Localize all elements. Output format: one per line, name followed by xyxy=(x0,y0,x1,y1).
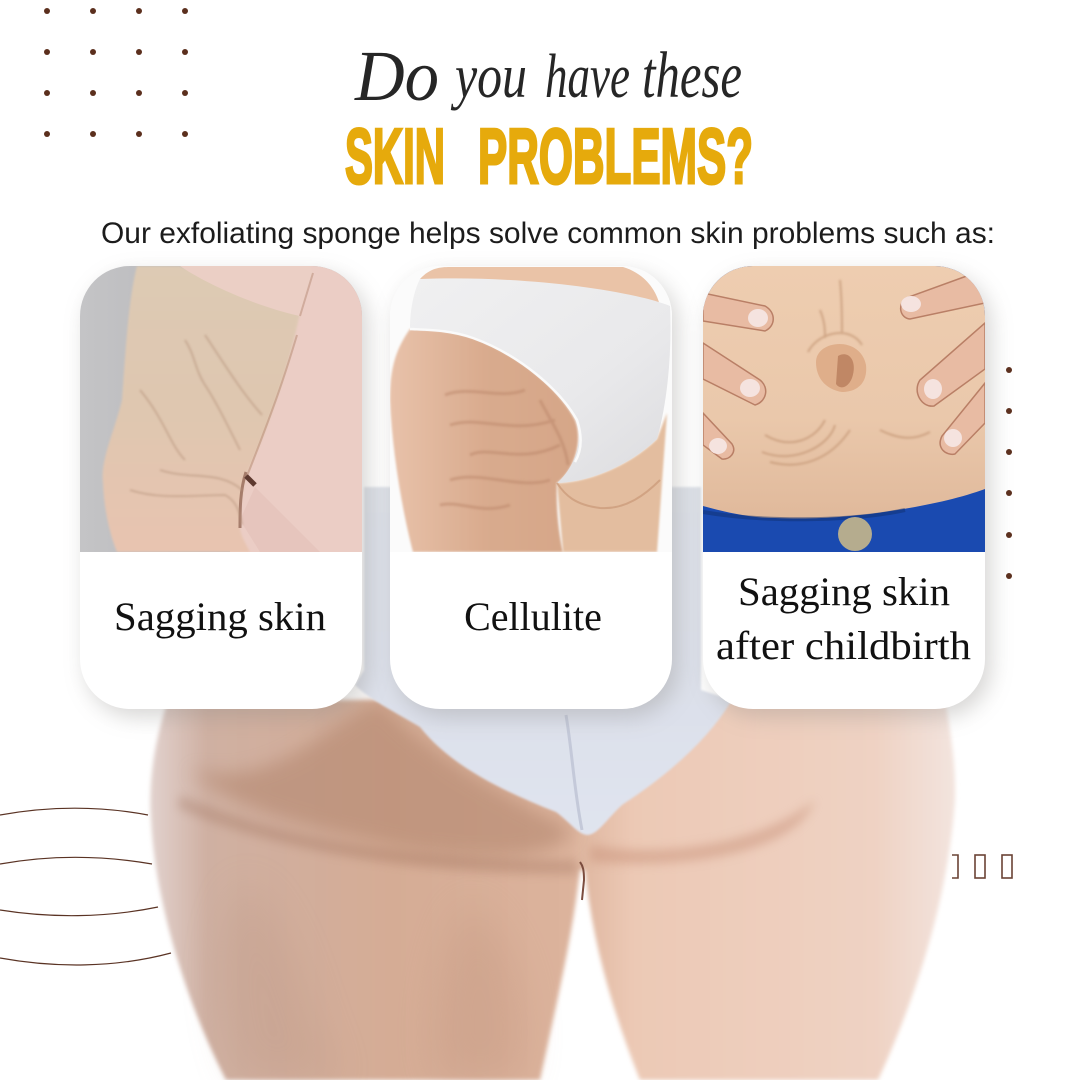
decorative dot column right xyxy=(1006,367,1012,579)
label: Sagging skin xyxy=(738,569,950,614)
label: after childbirth xyxy=(716,623,971,668)
title: skin problems: PROBLEMS? xyxy=(478,112,753,200)
title: script line: Do xyxy=(354,36,439,116)
panel: sagging skin xyxy=(80,266,368,717)
subtitle: Our exfoliating sponge helps solve common skin problems such as: xyxy=(101,217,995,250)
photo: belly xyxy=(703,266,985,552)
title: skin problems: SKIN xyxy=(345,112,445,200)
background photo: body xyxy=(150,487,955,1080)
panel: cellulite xyxy=(390,266,678,717)
photo: arm xyxy=(80,266,362,552)
title: script line: these xyxy=(642,39,742,112)
title: script line: you xyxy=(450,43,527,111)
decorative curved lines left xyxy=(0,808,171,965)
underwear in background xyxy=(355,487,732,835)
photo: thigh xyxy=(390,266,672,552)
decorative dot grid top left xyxy=(44,8,188,137)
title: script line xyxy=(354,36,742,116)
label: Sagging skin xyxy=(114,594,326,639)
title: script line: have xyxy=(545,43,630,111)
panel: sagging skin after childbirth xyxy=(703,266,991,717)
label: Cellulite xyxy=(464,594,602,639)
title: skin problems xyxy=(345,112,753,200)
decorative small rectangles right xyxy=(952,855,1012,878)
label xyxy=(716,569,971,668)
